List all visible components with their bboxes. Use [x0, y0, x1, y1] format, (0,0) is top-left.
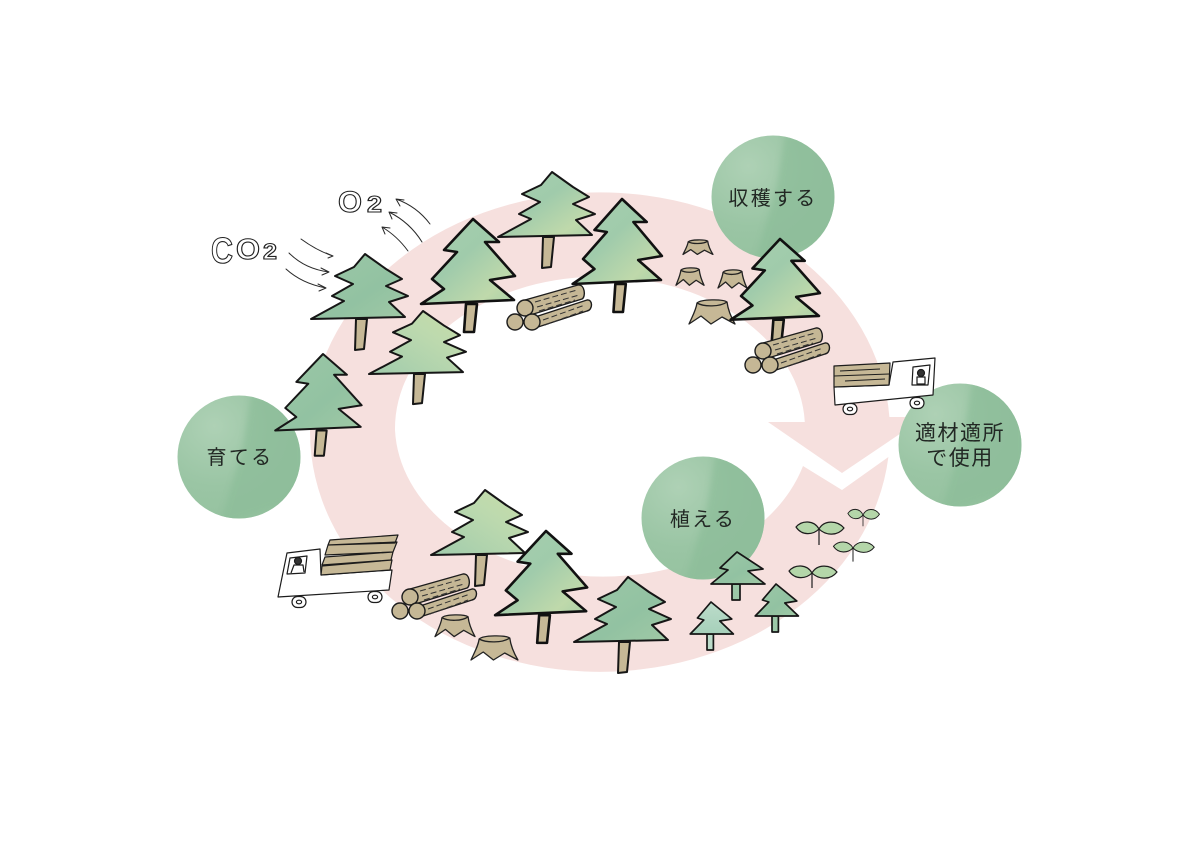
CO2 label: C — [211, 230, 233, 271]
tree: mature 4 — [421, 219, 515, 332]
tree: lower 10 — [574, 577, 671, 673]
label circle: 育てる — [178, 395, 304, 527]
tree: mature 5 — [498, 172, 595, 268]
label circle: 植える — [642, 456, 768, 588]
young tree 3 — [755, 584, 798, 632]
young tree 2 — [690, 602, 733, 650]
O2 label: O — [338, 186, 362, 219]
arrows: O2 release — [382, 199, 430, 251]
seedlings — [789, 509, 880, 588]
tree: mature 1 — [311, 254, 408, 350]
tree stumps bottom — [435, 615, 518, 660]
CO2 label: 2 — [263, 239, 277, 264]
label circle: 育てる: 育てる — [207, 446, 273, 469]
CO2 label — [211, 230, 277, 271]
label circle: 収穫する: 収穫する — [728, 187, 818, 210]
truck left — [278, 535, 398, 608]
young tree 1 — [711, 552, 765, 600]
circular arrow band — [310, 192, 925, 672]
label circle: 適材適所で使用: で使用 — [926, 447, 994, 470]
tree: lower 9 — [495, 531, 587, 643]
tree stumps top — [676, 240, 747, 324]
arrows: CO2 intake — [286, 239, 333, 291]
log pile upper middle — [507, 285, 592, 330]
log pile upper right — [745, 328, 830, 373]
O2 label: 2 — [367, 191, 382, 217]
log pile lower left — [392, 574, 476, 619]
label circle: 植える: 植える — [670, 508, 736, 531]
O2 label — [338, 186, 382, 219]
tree: mature 6 — [573, 199, 662, 312]
tree: mature 3 — [369, 311, 466, 404]
label circle: 適材適所で使用: 適材適所 — [915, 422, 1005, 445]
label circle: 収穫する — [712, 136, 834, 258]
tree: lower 8 — [431, 490, 528, 586]
CO2 label: O — [236, 234, 260, 266]
truck right — [834, 358, 935, 414]
label circle: 適材適所で使用 — [898, 383, 1025, 515]
tree: mature 2 — [275, 354, 362, 456]
tree: harvested side — [731, 239, 820, 346]
